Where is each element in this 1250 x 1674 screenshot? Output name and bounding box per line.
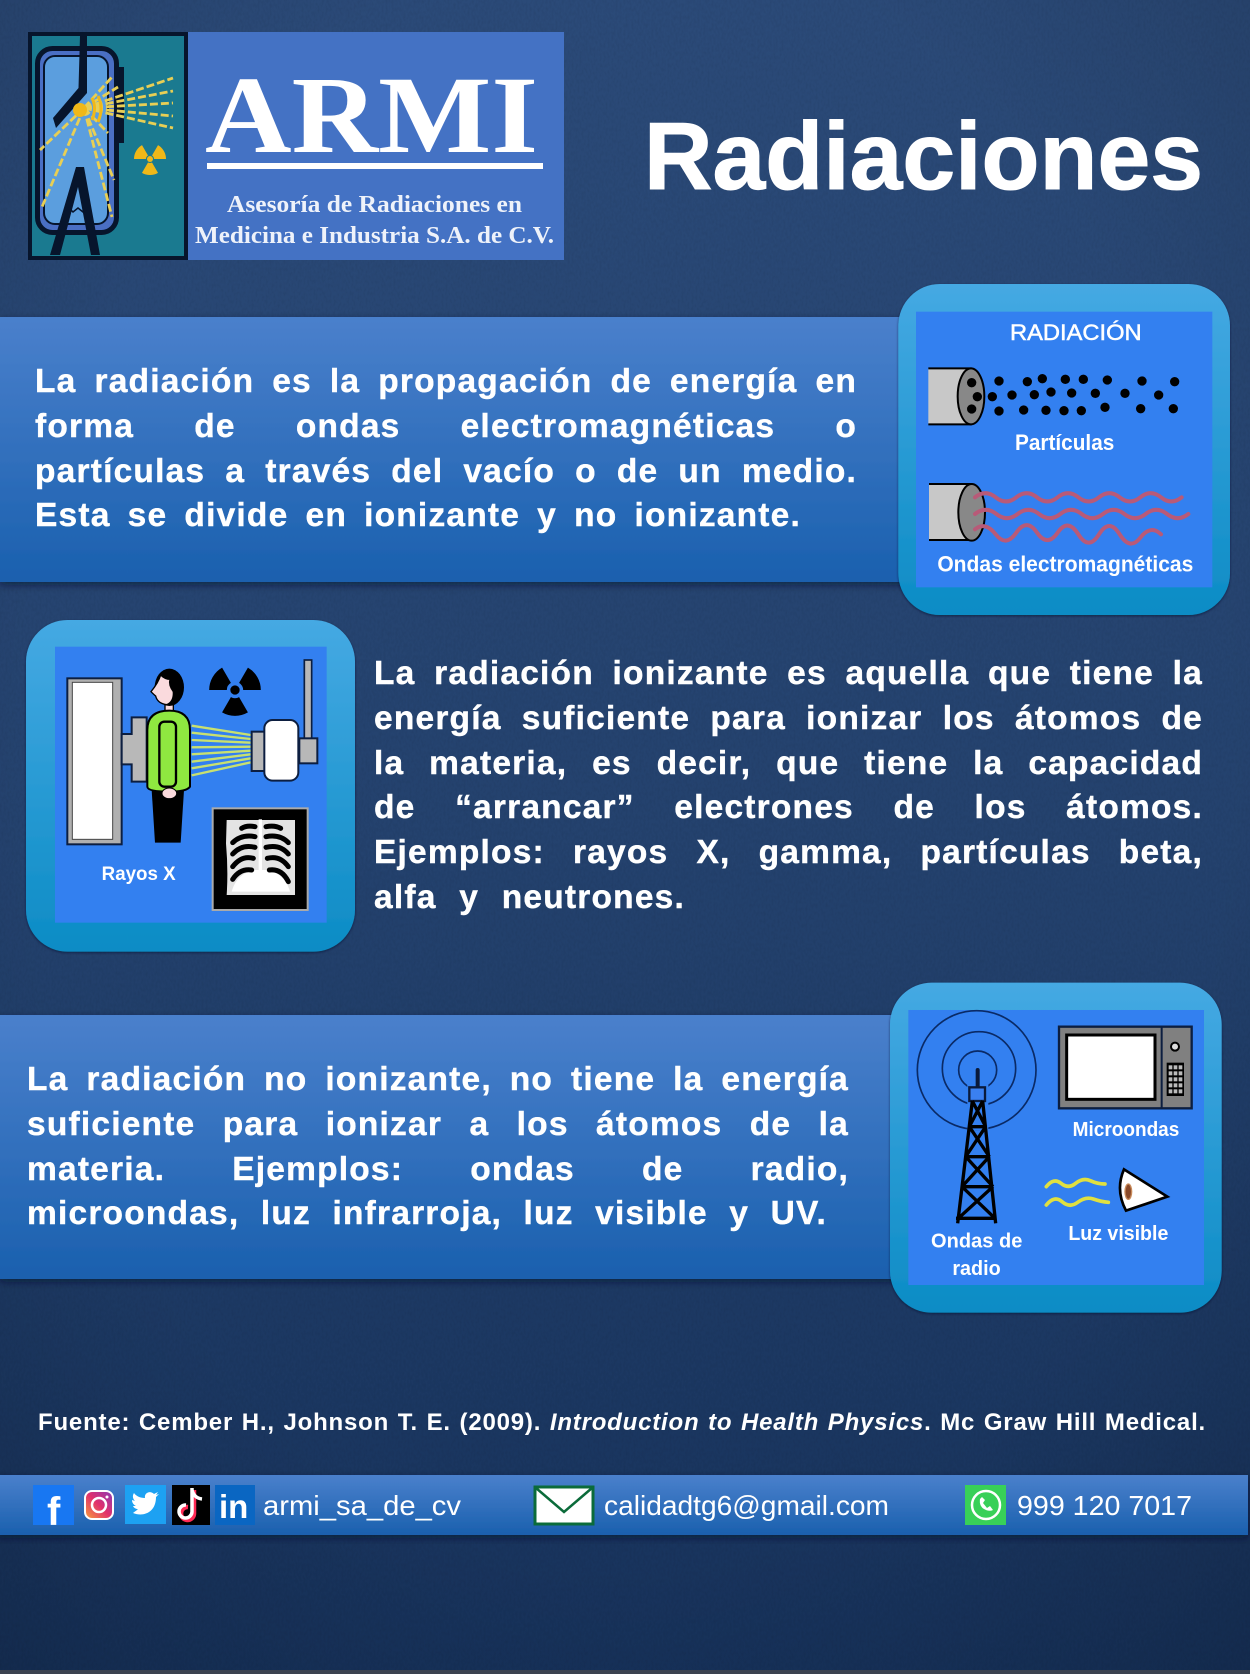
label: Ondas electromagnéticas: Ondas electromagnéticas (937, 552, 1193, 577)
icon: chest radiograph (213, 808, 308, 910)
panel: X-ray illustration (26, 620, 355, 952)
text block: ionizing radiation: La radiación ionizante es aquella que tiene la (374, 655, 1203, 692)
label: Ondas de radio (931, 1230, 1022, 1280)
text block: non-ionizing radiation: La radiación no ionizante, no tiene la energía (27, 1061, 849, 1098)
title: Radiaciones (644, 103, 1203, 210)
icon: microwave oven (1059, 1027, 1192, 1108)
footer contact bar (0, 1475, 1248, 1535)
text block: ionizing radiation: energía suficiente para ionizar los átomos de (374, 700, 1203, 737)
band: non-ionizing radiation (0, 1015, 920, 1279)
label: RADIACIÓN: RADIACIÓN (1010, 320, 1142, 345)
text: email address: calidadtg6@gmail.com (604, 1490, 889, 1521)
label: Microondas: Microondas (1073, 1119, 1179, 1141)
text: social handle: armi_sa_de_cv (263, 1490, 461, 1521)
text block: non-ionizing radiation: suficiente para ionizar a los átomos de la (27, 1106, 849, 1143)
source citation: Fuente: Cember H., Johnson T. E. (2009). Introduction to Health Physics. Mc Graw Hill Medical. (38, 1409, 1206, 1436)
icon: X-ray detector (67, 678, 147, 844)
icon: TikTok (172, 1485, 210, 1525)
icon: email (535, 1487, 593, 1524)
icon: radiation trefoil (212, 667, 258, 713)
text block: definition of radiation: forma de ondas electromagnéticas o (35, 408, 857, 445)
text block: definition of radiation (35, 363, 857, 534)
band: definition of radiation (0, 317, 930, 582)
text block: ionizing radiation: alfa y neutrones. (374, 879, 685, 916)
text block: definition of radiation: La radiación es la propagación de energía en (35, 363, 857, 400)
text block: non-ionizing radiation: materia. Ejemplos: ondas de radio, (27, 1151, 849, 1188)
text block: ionizing radiation: Ejemplos: rayos X, gamma, partículas beta, (374, 834, 1203, 871)
text block: non-ionizing radiation (27, 1061, 849, 1232)
icon: patient (147, 669, 190, 843)
text block: ionizing radiation: la materia, es decir, que tiene la capacidad (374, 745, 1203, 782)
icon: LinkedIn: in (219, 1488, 248, 1525)
panel: non-ionizing sources (890, 983, 1222, 1313)
logo: ARMI (30, 32, 564, 260)
text block: definition of radiation: Esta se divide en ionizante y no ionizante. (35, 497, 801, 534)
icon: X-ray tube (252, 660, 317, 781)
label: Rayos X: Rayos X (102, 864, 176, 885)
icon: radio tower (917, 1011, 1036, 1223)
icon: visible light and eye (1046, 1169, 1167, 1211)
panel: radiation types (898, 284, 1230, 615)
icon: X-ray beams (192, 726, 251, 775)
icon: wave source (929, 484, 1188, 544)
icon: particle source (928, 368, 1179, 424)
label: Ondas de radio: radio (952, 1258, 1001, 1280)
logo: ARMI: Asesoría de Radiaciones en (227, 192, 522, 218)
text block: ionizing radiation (374, 655, 1203, 916)
text block: non-ionizing radiation: microondas, luz infrarroja, luz visible y UV. (27, 1195, 827, 1232)
label: Luz visible: Luz visible (1068, 1223, 1168, 1245)
label: Partículas: Partículas (1015, 430, 1114, 455)
text: phone number: 999 120 7017 (1017, 1490, 1192, 1521)
label: Ondas de radio: Ondas de (931, 1230, 1022, 1252)
icon: Instagram (85, 1491, 113, 1519)
logo: ARMI: ARMI (205, 54, 538, 176)
text block: definition of radiation: partículas a través del vacío o de un medio. (35, 453, 857, 490)
icon: LinkedIn (215, 1485, 255, 1525)
logo: ARMI: Medicina e Industria S.A. de C.V. (195, 223, 554, 249)
icon: Twitter (125, 1485, 166, 1524)
icon: Facebook (33, 1485, 74, 1534)
icon: Facebook: f (47, 1490, 61, 1534)
icon: WhatsApp (965, 1485, 1006, 1525)
text block: ionizing radiation: de “arrancar” electrones de los átomos. (374, 789, 1203, 826)
